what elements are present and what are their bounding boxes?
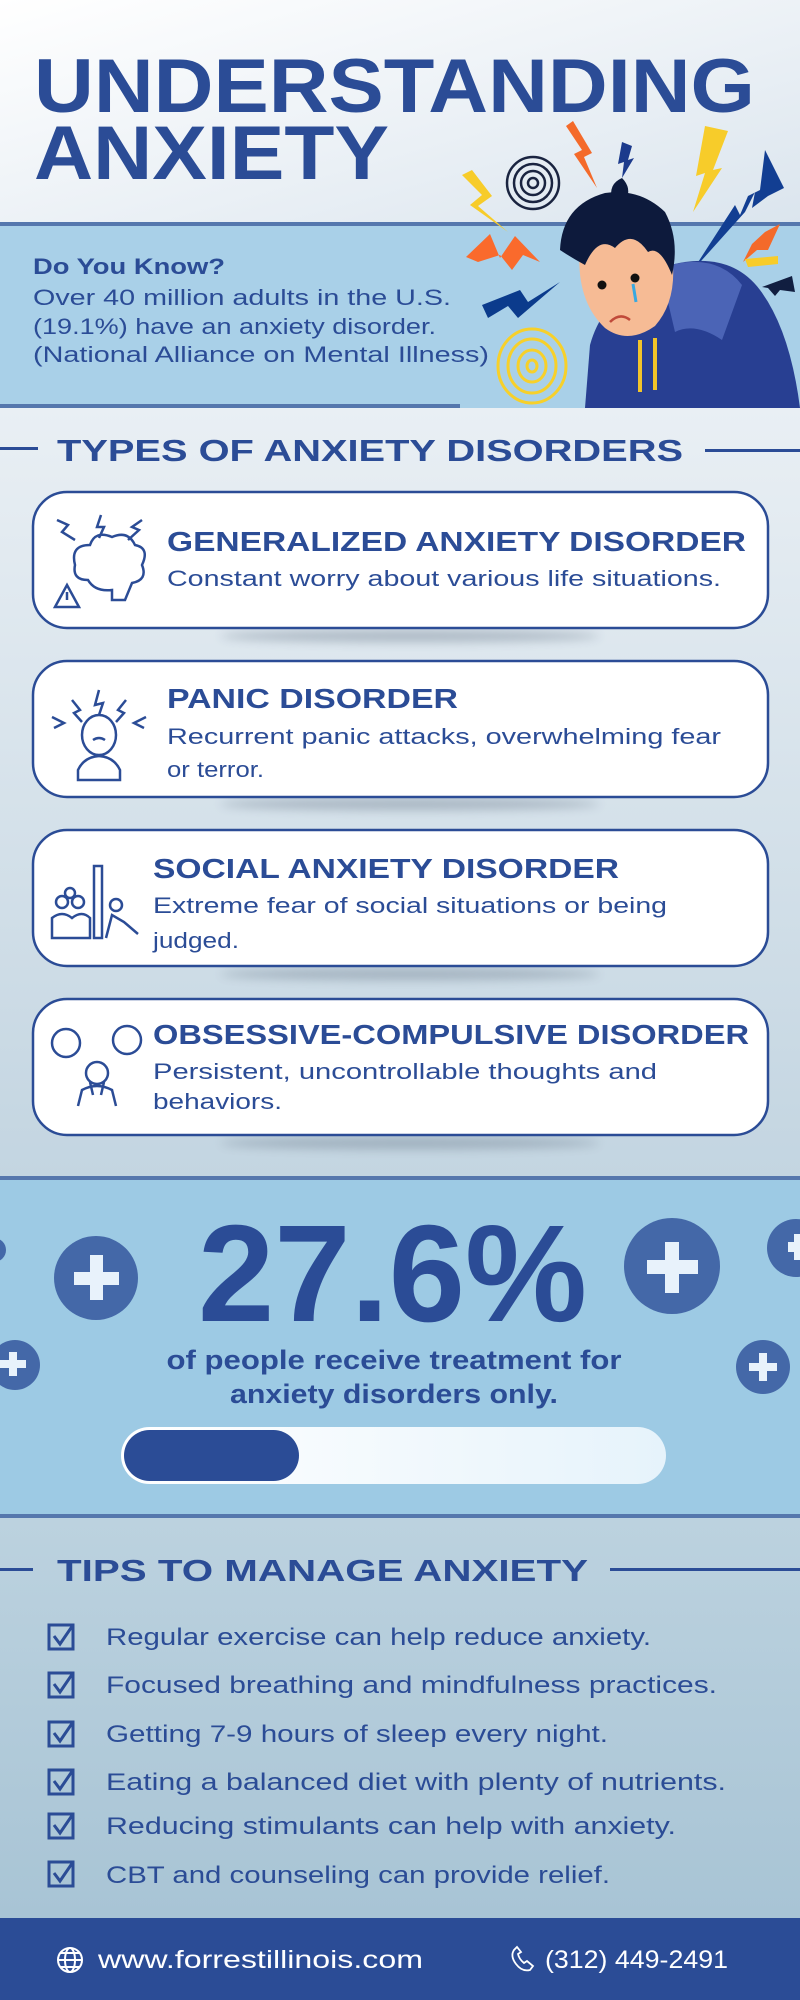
- spirals: [507, 157, 559, 209]
- stat caption: [166, 1345, 622, 1409]
- panel: card ocd: Persistent, uncontrollable thoughts and: [153, 1059, 657, 1084]
- text: do you know fact: Over 40 million adults in the U.S.: [33, 285, 451, 310]
- heading: types of anxiety disorders: TYPES OF ANXIETY DISORDERS: [57, 433, 683, 468]
- panel: card social anxiety: Extreme fear of social situations or being: [153, 893, 667, 918]
- list: tips: Eating a balanced diet with plenty of nutrients.: [106, 1769, 726, 1796]
- panel: card generalized anxiety: GENERALIZED ANXIETY DISORDER: [167, 526, 746, 557]
- text: do you know fact: [33, 254, 489, 367]
- card shadows: [220, 630, 600, 1149]
- heading: tips to manage anxiety: [0, 1553, 800, 1588]
- list: tips: [49, 1624, 726, 1889]
- title: ANXIETY: [34, 111, 389, 196]
- icon: phone: [512, 1947, 533, 1970]
- icon: stressed woman: [52, 690, 146, 780]
- icon: thinking person with bubbles: [52, 1026, 141, 1106]
- footer: (312) 449-2491: [545, 1946, 728, 1974]
- progress bar: [121, 1427, 666, 1484]
- list: tips: Regular exercise can help reduce anxiety.: [106, 1624, 651, 1651]
- head: [579, 219, 673, 336]
- icon: plus circles: [0, 1218, 800, 1394]
- panel: do you know band: [0, 222, 800, 408]
- panel: card social anxiety: judged.: [152, 928, 239, 953]
- stat number: 27.6%: [198, 1197, 587, 1351]
- bolts: [466, 234, 540, 270]
- text: do you know fact: (National Alliance on Mental Illness): [33, 342, 489, 367]
- panel: card ocd: OBSESSIVE-COMPULSIVE DISORDER: [153, 1019, 749, 1050]
- panel: card social anxiety: SOCIAL ANXIETY DISORDER: [153, 853, 619, 884]
- panel: card ocd: behaviors.: [153, 1089, 282, 1114]
- icon: brain with warning: [55, 515, 145, 607]
- panel: card ocd: [33, 999, 768, 1135]
- stat caption: anxiety disorders only.: [230, 1379, 558, 1409]
- footer: [0, 1918, 800, 2000]
- panel: card generalized anxiety: Constant worry about various life situations.: [167, 566, 721, 591]
- footer: www.forrestillinois.com: [97, 1946, 423, 1974]
- heading: tips to manage anxiety: TIPS TO MANAGE ANXIETY: [57, 1553, 588, 1588]
- panel: treatment statistic: [0, 1176, 800, 1518]
- panel: card panic disorder: Recurrent panic attacks, overwhelming fear: [167, 724, 721, 749]
- icon: isolated person: [52, 866, 138, 938]
- panel: card social anxiety: [33, 830, 768, 966]
- icon: globe: [58, 1948, 82, 1972]
- panel: card generalized anxiety: [33, 492, 768, 628]
- panel: card panic disorder: PANIC DISORDER: [167, 683, 458, 714]
- panel: card panic disorder: [33, 661, 768, 797]
- title: UNDERSTANDING: [34, 44, 755, 129]
- hoodie: [585, 261, 800, 408]
- list: tips: CBT and counseling can provide relief.: [106, 1862, 610, 1889]
- text: do you know fact: Do You Know?: [33, 254, 225, 279]
- list: tips: Getting 7-9 hours of sleep every night.: [106, 1721, 608, 1748]
- title: [34, 44, 755, 196]
- illustration: anxious person: [462, 121, 800, 408]
- heading: types of anxiety disorders: [0, 433, 800, 468]
- list: tips: Reducing stimulants can help with anxiety.: [106, 1813, 676, 1840]
- panel: card panic disorder: or terror.: [167, 757, 264, 782]
- text: do you know fact: (19.1%) have an anxiety disorder.: [33, 314, 436, 339]
- list: tips: Focused breathing and mindfulness practices.: [106, 1672, 717, 1699]
- stat caption: of people receive treatment for: [166, 1345, 622, 1375]
